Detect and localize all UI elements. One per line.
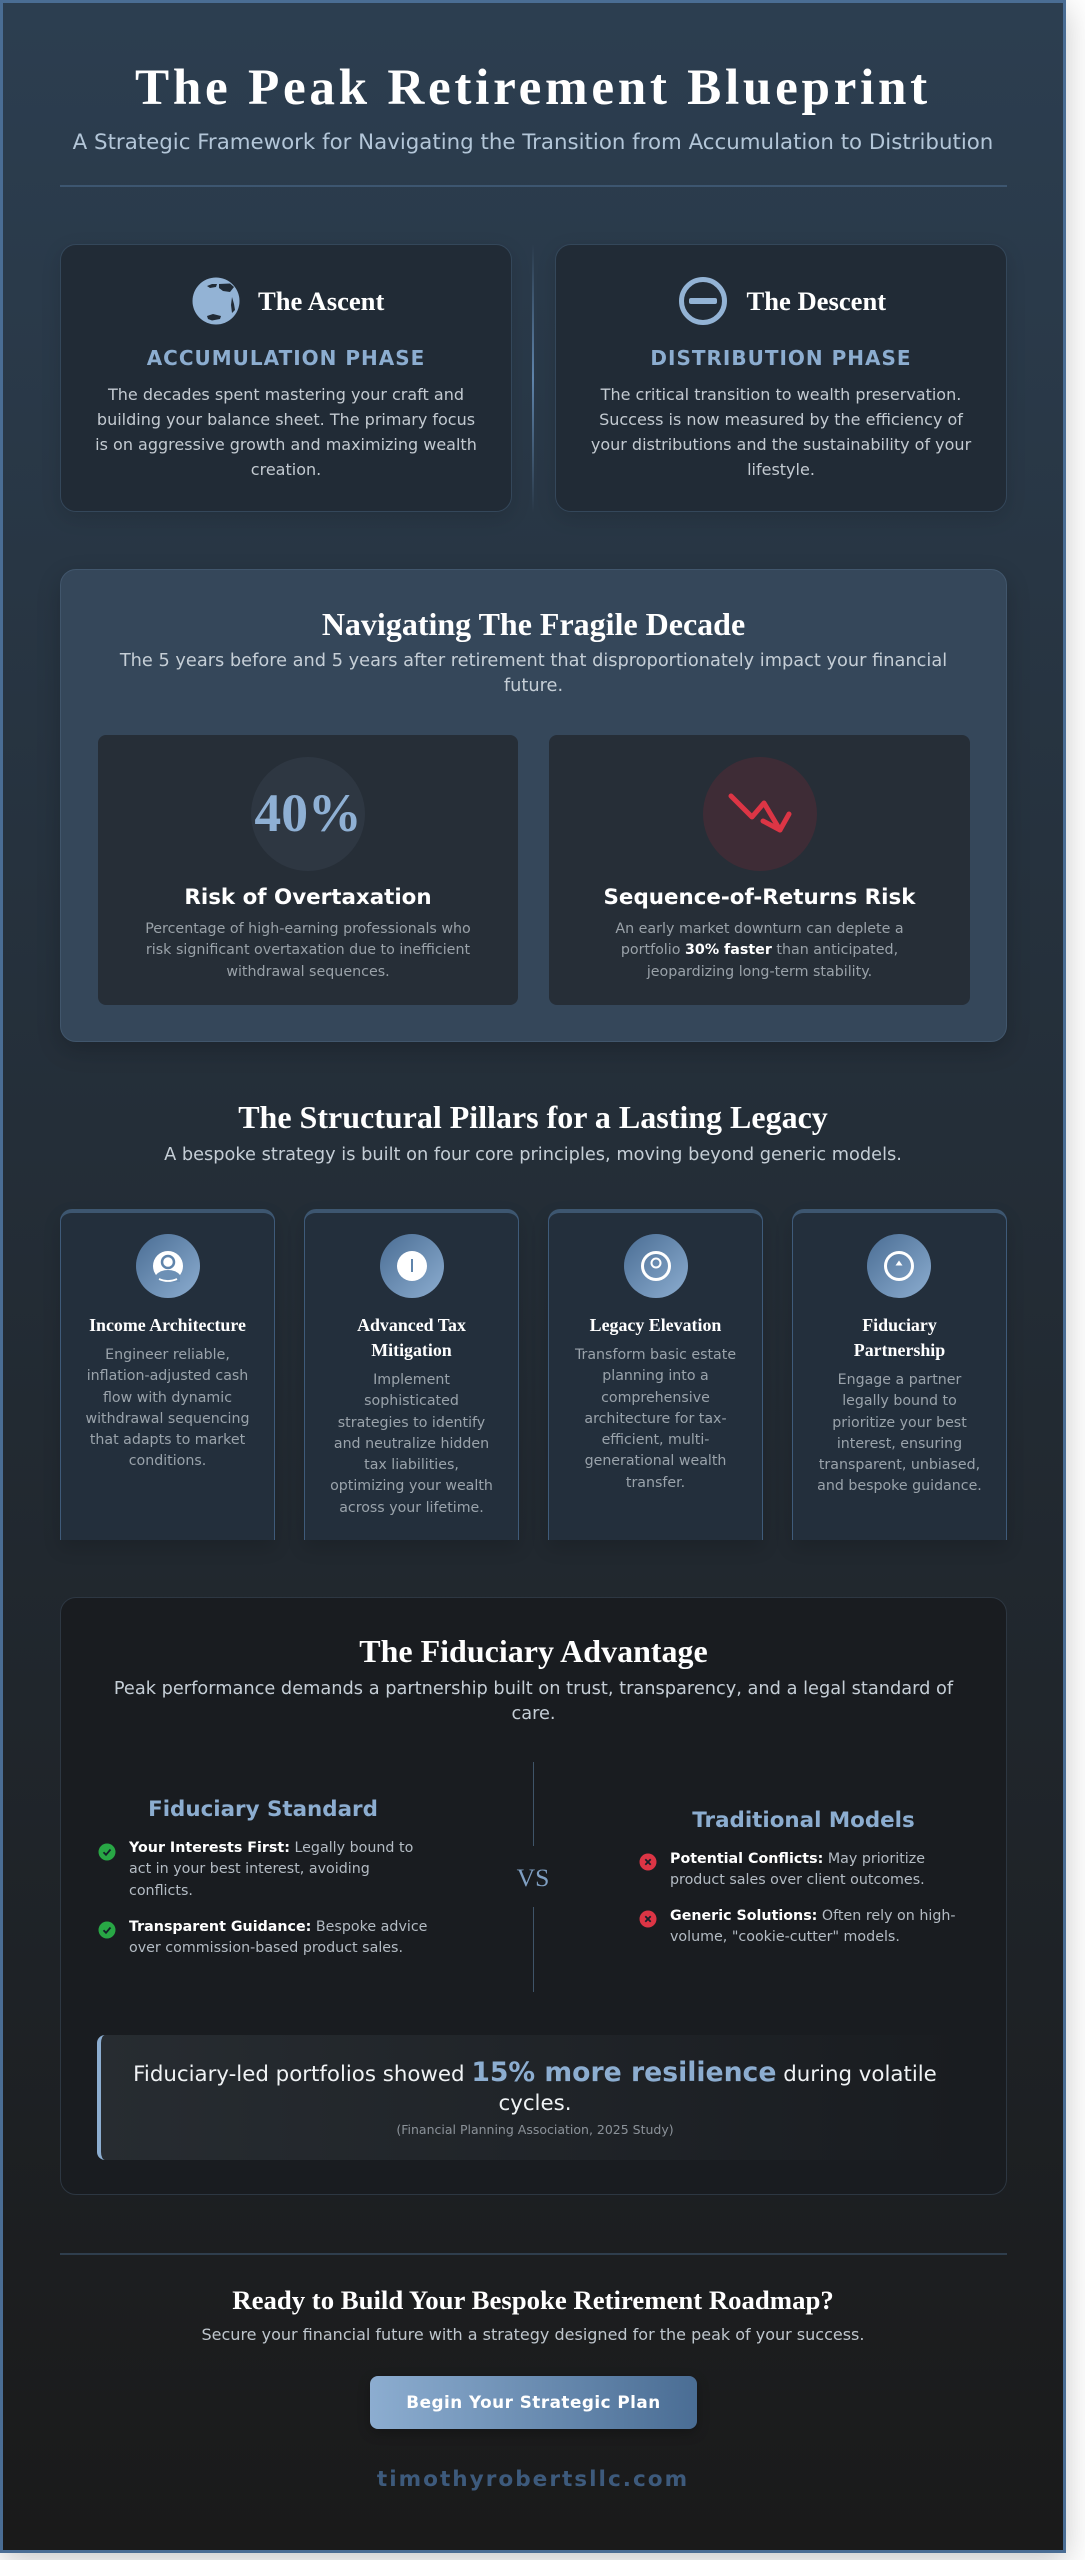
description: [95, 385, 477, 479]
callout: resilience stat: [97, 2035, 969, 2160]
list item: conflicts.: [129, 1883, 193, 1899]
icon: falling chart: [703, 757, 817, 871]
button label: Begin Your Strategic Plan: [406, 2392, 661, 2412]
list item: Generic Solutions: Often rely on high-: [670, 1908, 956, 1924]
panel: the ascent: [60, 244, 512, 512]
pillar text: strategies to identify: [338, 1415, 485, 1431]
panel: fragile decade: [60, 569, 1007, 1042]
title: The Peak Retirement Blueprint: [135, 59, 931, 116]
pillar text: [86, 1347, 249, 1469]
pillar title: [357, 1315, 466, 1360]
button: [370, 2376, 697, 2429]
list item: product sales over client outcomes.: [670, 1872, 925, 1888]
card text: risk significant overtaxation due to inefficient: [146, 942, 470, 958]
pillar text: generational wealth: [585, 1453, 726, 1469]
card text: portfolio 30% faster than anticipated,: [621, 942, 898, 958]
subheading: The 5 years before and 5 years after retirement that disproportionately impact your financial: [120, 651, 947, 671]
subheading: future.: [504, 676, 563, 696]
pillar text: Transform basic estate: [575, 1347, 736, 1363]
list item: over commission-based product sales.: [129, 1940, 403, 1956]
pillar text: transparent, unbiased,: [819, 1457, 980, 1473]
description: building your balance sheet. The primary focus: [97, 410, 475, 429]
source: (Financial Planning Association, 2025 Study): [396, 2122, 674, 2137]
card text: jeopardizing long-term stability.: [647, 964, 872, 980]
description: The critical transition to wealth preservation.: [601, 385, 961, 404]
pillar text: withdrawal sequencing: [86, 1411, 249, 1427]
subheading: [120, 651, 947, 696]
pillar text: and bespoke guidance.: [817, 1478, 982, 1494]
footer url: timothyrobertsllc.com: [377, 2467, 689, 2492]
pillar: fiduciary partnership: [792, 1209, 1007, 1540]
icon: cross: [640, 1854, 656, 1870]
list item: Transparent Guidance: Bespoke advice: [129, 1919, 427, 1935]
heading: the descent: The Descent: [746, 286, 886, 316]
card: overtaxation: [98, 735, 518, 1005]
text: call to action: Secure your financial future with a strategy designed for the peak of your success.: [202, 2325, 864, 2344]
description: lifestyle.: [747, 460, 815, 479]
list item: Your Interests First: Legally bound to: [129, 1840, 413, 1856]
pillar text: Implement: [373, 1372, 450, 1388]
phase label: ACCUMULATION PHASE: [147, 346, 425, 370]
description: The decades spent mastering your craft and: [108, 385, 464, 404]
pillar text: that adapts to market: [90, 1432, 245, 1448]
description: your distributions and the sustainability of your: [591, 435, 971, 454]
card: sequence of returns: [549, 735, 970, 1005]
heading: Navigating The Fragile Decade: [322, 606, 745, 642]
pillar title: Partnership: [854, 1340, 945, 1360]
pillar: income architecture: [60, 1209, 275, 1540]
icon: check: [98, 1844, 116, 1860]
pillar text: efficient, multi-: [602, 1432, 709, 1448]
icon: minus circle: [679, 277, 727, 325]
card text: [145, 921, 471, 980]
description: [591, 385, 972, 479]
pillar text: planning into a: [602, 1368, 709, 1384]
icon: person: [136, 1234, 200, 1298]
icon: ring with arrow: [867, 1234, 931, 1298]
list item: volume, "cookie-cutter" models.: [670, 1929, 900, 1945]
list item: act in your best interest, avoiding: [129, 1861, 370, 1877]
pillar text: inflation-adjusted cash: [87, 1368, 248, 1384]
heading: the ascent: The Ascent: [258, 286, 384, 316]
subheading: care.: [511, 1704, 556, 1724]
icon: ring target: [624, 1234, 688, 1298]
list item: [670, 1851, 925, 1888]
description: is on aggressive growth and maximizing wealth: [95, 435, 477, 454]
pillar: legacy elevation: [548, 1209, 763, 1540]
card text: Percentage of high-earning professionals who: [145, 921, 471, 937]
card text: withdrawal sequences.: [226, 964, 390, 980]
pillar text: Engage a partner: [838, 1372, 961, 1388]
pillar: advanced tax mitigation: [304, 1209, 519, 1540]
stat: 40%: 40%: [254, 783, 362, 843]
pillar title: Mitigation: [371, 1340, 452, 1360]
heading: structural pillars: The Structural Pillars for a Lasting Legacy: [238, 1099, 828, 1135]
subheading: pillars: A bespoke strategy is built on four core principles, moving beyond generic models.: [164, 1145, 902, 1165]
subheading: [114, 1679, 954, 1724]
column: traditional models: [640, 1808, 956, 1945]
description: Success is now measured by the efficiency of: [599, 410, 963, 429]
pillar text: interest, ensuring: [837, 1436, 962, 1452]
pillar title: Legacy Elevation: [590, 1315, 721, 1335]
pillar text: across your lifetime.: [339, 1500, 484, 1516]
pillar text: prioritize your best: [832, 1415, 967, 1431]
card title: Risk of Overtaxation: [184, 885, 432, 910]
list item: Potential Conflicts: May prioritize: [670, 1851, 925, 1867]
callout text: Fiduciary-led portfolios showed 15% more resilience during volatile: [133, 2057, 937, 2088]
pillar text: sophisticated: [364, 1393, 459, 1409]
column: fiduciary standard: [98, 1797, 427, 1956]
pillar title: Fiduciary: [862, 1315, 937, 1335]
heading: The Fiduciary Advantage: [359, 1633, 708, 1669]
pillar title: Income Architecture: [89, 1315, 246, 1335]
icon: info circle: [380, 1234, 444, 1298]
pillar text: transfer.: [626, 1475, 685, 1491]
pillar text: legally bound to: [842, 1393, 957, 1409]
column heading: Fiduciary Standard: [148, 1797, 378, 1822]
heading: call to action: Ready to Build Your Bespoke Retirement Roadmap?: [232, 2285, 834, 2315]
pillar text: [574, 1347, 736, 1491]
callout text: cycles.: [498, 2091, 572, 2116]
pillar text: Engineer reliable,: [105, 1347, 230, 1363]
list item: [670, 1908, 956, 1945]
pillar text: conditions.: [129, 1453, 206, 1469]
panel: fiduciary advantage: [60, 1597, 1007, 2195]
list item: [129, 1919, 427, 1956]
list item: [128, 1840, 413, 1899]
pillar text: tax liabilities,: [364, 1457, 459, 1473]
icon: check: [98, 1922, 116, 1938]
phase label: DISTRIBUTION PHASE: [650, 346, 912, 370]
pillar text: [330, 1372, 493, 1516]
card text: An early market downturn can deplete a: [615, 921, 904, 937]
pillar title: Advanced Tax: [357, 1315, 466, 1335]
subheading: Peak performance demands a partnership built on trust, transparency, and a legal standard of: [114, 1679, 953, 1699]
pillar text: comprehensive: [601, 1390, 710, 1406]
stat circle: [251, 757, 365, 871]
pillar text: optimizing your wealth: [330, 1478, 493, 1494]
column heading: Traditional Models: [692, 1808, 915, 1833]
pillar text: architecture for tax-: [584, 1411, 727, 1427]
icon: globe: [192, 278, 240, 324]
panel: the descent: [555, 244, 1007, 512]
pillar title: [854, 1315, 945, 1360]
pillar text: flow with dynamic: [103, 1390, 232, 1406]
icon: cross: [640, 1910, 656, 1928]
callout text: [133, 2057, 937, 2116]
subtitle: A Strategic Framework for Navigating the Transition from Accumulation to Distribution: [73, 130, 993, 155]
pillar text: and neutralize hidden: [334, 1436, 489, 1452]
pillar text: [817, 1372, 982, 1494]
vs label: VS: [517, 1863, 549, 1892]
description: creation.: [251, 460, 321, 479]
card title: Sequence-of-Returns Risk: [604, 885, 915, 910]
card text: [615, 921, 904, 980]
